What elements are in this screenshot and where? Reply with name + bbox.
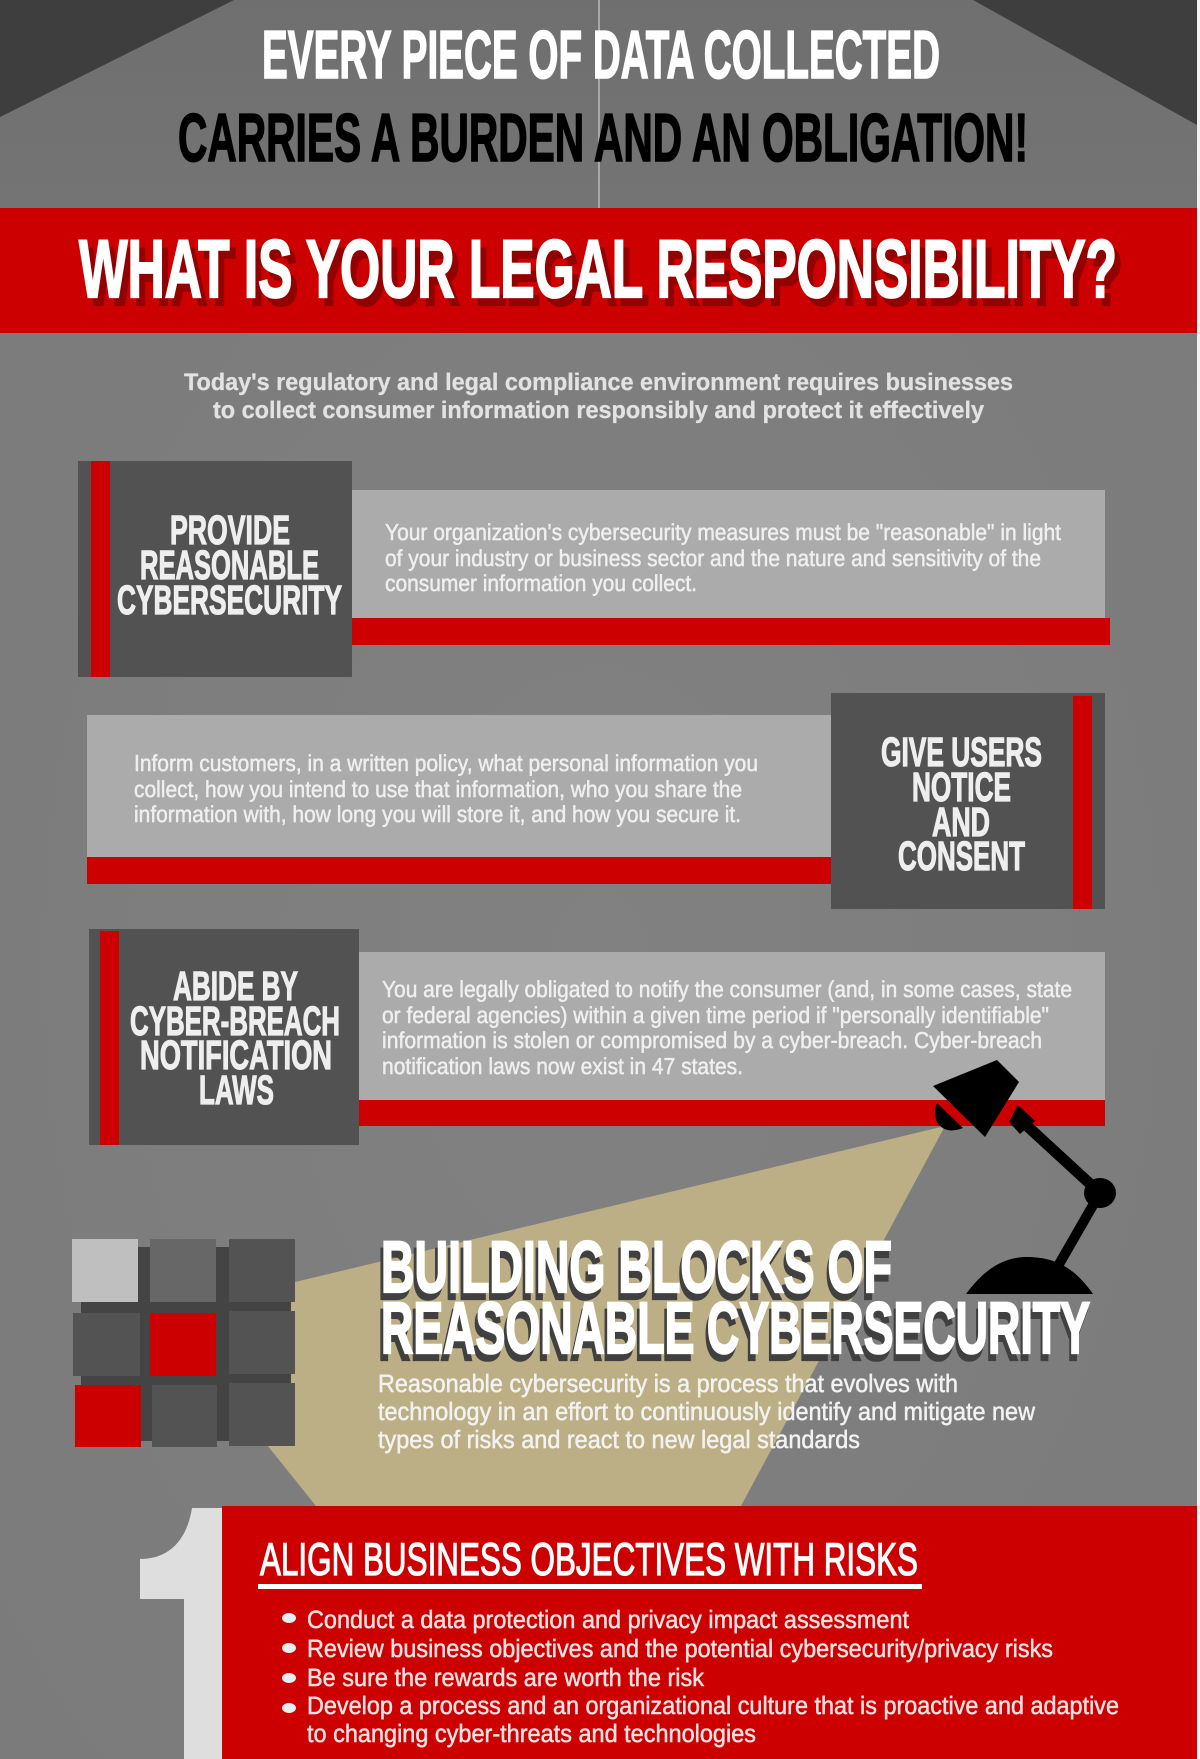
panel body text: information with, how long you will store it, and how you secure it. xyxy=(134,801,741,827)
panel heading: ABIDE BY xyxy=(173,963,298,1009)
icon: desk lamp xyxy=(933,1060,1116,1294)
intro text xyxy=(184,369,1013,424)
panel heading xyxy=(130,963,340,1113)
icon: building blocks grid xyxy=(72,1239,295,1447)
step heading: ALIGN BUSINESS OBJECTIVES WITH RISKS xyxy=(260,1533,918,1585)
lamp light beam xyxy=(162,1126,945,1506)
panel heading: CYBER-BREACH xyxy=(130,998,340,1044)
panel heading: CONSENT xyxy=(898,833,1025,879)
bullet list xyxy=(282,1606,1119,1748)
bullet list: Develop a process and an organizational culture that is proactive and adaptive xyxy=(307,1692,1119,1720)
panel body text: Inform customers, in a written policy, what personal information you xyxy=(134,750,758,776)
panel body text: notification laws now exist in 47 states. xyxy=(382,1053,743,1079)
panel body text xyxy=(382,976,1072,1079)
panel body text: You are legally obligated to notify the consumer (and, in some cases, state xyxy=(382,976,1072,1002)
panel: provide reasonable cybersecurity xyxy=(78,461,1110,677)
building blocks description xyxy=(378,1370,1036,1454)
building blocks heading: BUILDING BLOCKS OF xyxy=(378,1234,890,1315)
red banner xyxy=(0,208,1197,333)
intro text: to collect consumer information responsibly and protect it effectively xyxy=(213,397,985,424)
building blocks heading: BUILDING BLOCKS OF xyxy=(381,1227,892,1308)
panel heading: LAWS xyxy=(199,1067,274,1113)
panel: step 1 align business objectives xyxy=(222,1506,1197,1759)
bullet list: Be sure the rewards are worth the risk xyxy=(307,1664,704,1692)
numeral 1 xyxy=(140,1508,222,1759)
panel heading: NOTIFICATION xyxy=(140,1032,332,1078)
panel body text: of your industry or business sector and the nature and sensitivity of the xyxy=(385,545,1041,571)
panel body text: information is stolen or compromised by a cyber-breach. Cyber-breach xyxy=(382,1027,1042,1053)
panel: abide by cyber-breach notification laws xyxy=(89,929,1105,1145)
panel body text: or federal agencies) within a given time period if "personally identifiable" xyxy=(382,1002,1049,1028)
panel heading xyxy=(117,507,342,623)
panel heading: AND xyxy=(932,799,990,845)
panel body text xyxy=(134,750,758,827)
building blocks description: Reasonable cybersecurity is a process that evolves with xyxy=(378,1370,958,1398)
building blocks heading xyxy=(378,1227,1090,1376)
panel body text: Your organization's cybersecurity measures must be "reasonable" in light xyxy=(385,519,1062,545)
panel heading: PROVIDE xyxy=(170,507,290,553)
building blocks description: technology in an effort to continuously identify and mitigate new xyxy=(378,1398,1036,1426)
intro text: Today's regulatory and legal compliance environment requires businesses xyxy=(184,369,1013,396)
panel heading xyxy=(881,729,1042,879)
panel heading: GIVE USERS xyxy=(881,729,1042,775)
panel heading: NOTICE xyxy=(912,764,1011,810)
panel body text xyxy=(385,519,1062,596)
building blocks description: types of risks and react to new legal standards xyxy=(378,1426,860,1454)
bullet list: Review business objectives and the potential cybersecurity/privacy risks xyxy=(307,1635,1053,1663)
bullet list: to changing cyber-threats and technologies xyxy=(307,1720,756,1748)
panel: give users notice and consent xyxy=(87,693,1105,909)
panel body text: collect, how you intend to use that information, who you share the xyxy=(134,776,742,802)
panel heading: CYBERSECURITY xyxy=(117,577,342,623)
header background xyxy=(0,0,1197,208)
panel body text: consumer information you collect. xyxy=(385,570,697,596)
panel heading: REASONABLE xyxy=(140,542,319,588)
bullet list: Conduct a data protection and privacy impact assessment xyxy=(307,1606,909,1634)
